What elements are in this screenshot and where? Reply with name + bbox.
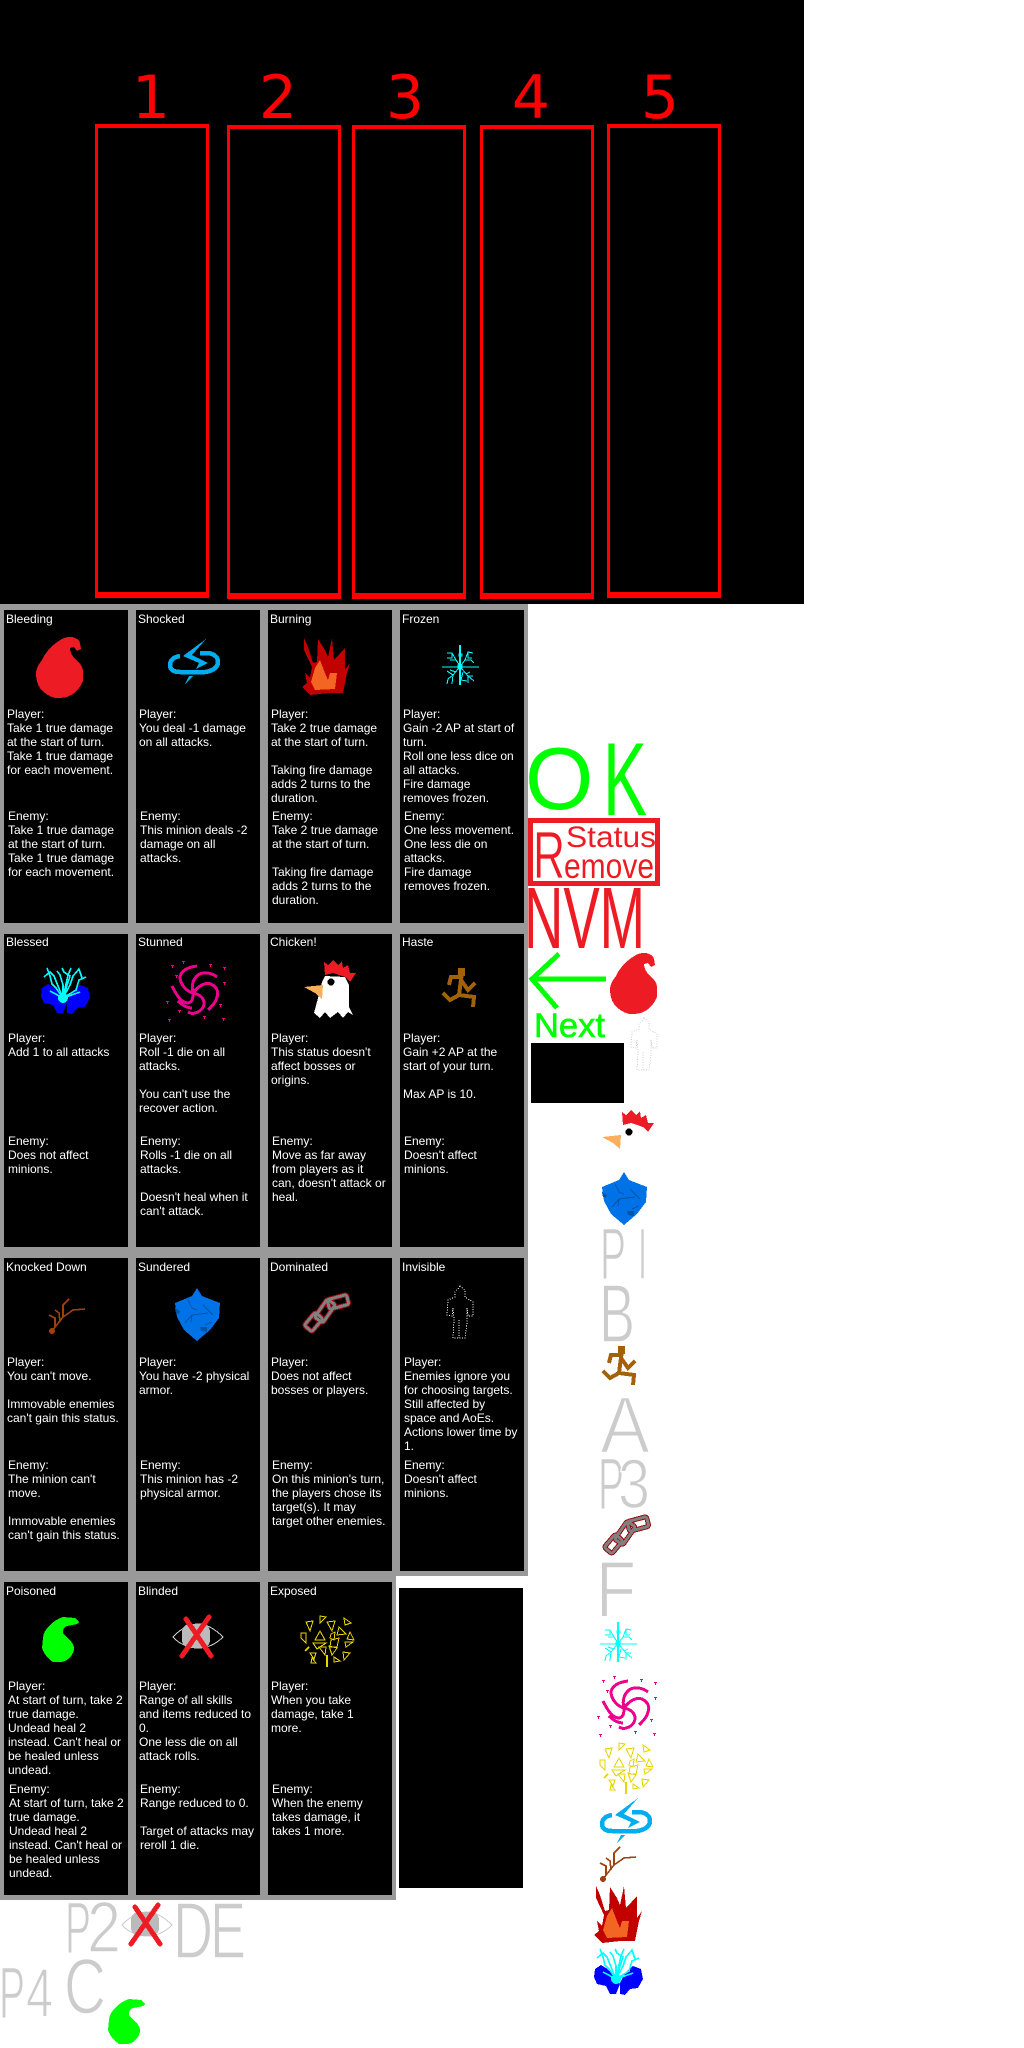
player text: for each movement. (7, 763, 113, 777)
icon: broken branch (48, 1298, 85, 1334)
panel: status grid background (0, 604, 528, 1576)
enemy text (404, 809, 514, 893)
icon: snowflake (442, 645, 479, 685)
icon: flame (302, 638, 350, 695)
icon: invisible figure copy (631, 1018, 657, 1070)
enemy text: When the enemy (272, 1796, 363, 1810)
player text (271, 1679, 354, 1735)
slot 2 (227, 63, 341, 599)
player text: Player: (271, 707, 308, 721)
icon: branch copy (600, 1847, 636, 1882)
sprite sheet: loose assets: I (638, 1214, 647, 1295)
enemy text: Enemy: (272, 1782, 313, 1796)
enemy text: minions. (404, 1162, 449, 1176)
enemy text: damage on all (140, 837, 215, 851)
icon: flame copy (594, 1886, 642, 1943)
player text: and items reduced to (139, 1707, 251, 1721)
Status Remove button (528, 818, 660, 893)
player text: Roll -1 die on all (139, 1045, 225, 1059)
player text: Player: (404, 1355, 441, 1369)
player text: 0. (139, 1721, 149, 1735)
player text: Player: (139, 707, 176, 721)
heading: Blessed (6, 935, 49, 949)
card: Blinded (136, 1582, 260, 1895)
label C: C (64, 1942, 106, 2030)
icon: blessed hands copy (594, 1949, 643, 1995)
black swatch (531, 1043, 624, 1103)
player text (139, 1355, 249, 1397)
card: Invisible (400, 1258, 524, 1571)
heading: Burning (270, 612, 311, 626)
enemy text: at the start of turn. (8, 837, 105, 851)
card: Chicken! (268, 934, 392, 1247)
enemy text: takes 1 more. (272, 1824, 345, 1838)
player text: Still affected by (404, 1397, 485, 1411)
enemy text: reroll 1 die. (140, 1838, 199, 1852)
player text (8, 1679, 123, 1777)
enemy text: can't gain this status. (8, 1528, 120, 1542)
player text: adds 2 turns to the (271, 777, 370, 791)
enemy text: Take 2 true damage (272, 823, 378, 837)
player text (139, 707, 246, 749)
player text: Taking fire damage (271, 763, 372, 777)
enemy text: Range reduced to 0. (140, 1796, 249, 1810)
enemy text: Enemy: (404, 1134, 445, 1148)
icon: running figure copy (603, 1346, 635, 1385)
enemy text: Enemy: (140, 1458, 181, 1472)
enemy text: Enemy: (404, 1458, 445, 1472)
enemy text (272, 1134, 386, 1204)
enemy text (140, 1782, 254, 1852)
enemy text: One less movement. (404, 823, 514, 837)
player text: Take 2 true damage (271, 721, 377, 735)
enemy text (140, 1458, 238, 1500)
enemy text: Does not affect (8, 1148, 88, 1162)
icon: green drop (42, 1617, 79, 1662)
enemy text (404, 1458, 477, 1500)
panel: status grid last row background (0, 1576, 396, 1900)
player text: Does not affect (271, 1369, 352, 1383)
enemy text: Take 1 true damage (8, 823, 114, 837)
player text: duration. (271, 791, 318, 805)
heading: Exposed (270, 1584, 317, 1598)
player text: can't gain this status. (7, 1411, 119, 1425)
player text: start of your turn. (403, 1059, 494, 1073)
player text: true damage. (8, 1707, 79, 1721)
player text: Add 1 to all attacks (8, 1045, 109, 1059)
player text: Take 1 true damage (7, 749, 113, 763)
player text (271, 707, 377, 805)
icon: chain copy (604, 1517, 649, 1554)
heading: Sundered (138, 1260, 190, 1274)
enemy text: Enemy: (8, 809, 49, 823)
enemy text: the players chose its (272, 1486, 381, 1500)
icon: crossed eye copy (122, 1905, 172, 1944)
label DE: D (173, 1886, 213, 1975)
icon: green drop copy (108, 1999, 145, 2044)
enemy text (9, 1782, 124, 1880)
label P3: 3 (618, 1445, 650, 1523)
player text: Actions lower time by (404, 1425, 517, 1439)
player text: recover action. (139, 1101, 218, 1115)
Status Remove button: R (533, 818, 565, 893)
card: Stunned (136, 934, 260, 1247)
icon: chicken (304, 960, 356, 1018)
enemy text: Immovable enemies (8, 1514, 115, 1528)
enemy text: Enemy: (9, 1782, 50, 1796)
player text: At start of turn, take 2 (8, 1693, 123, 1707)
icon: chicken copy (602, 1110, 654, 1168)
label P4: P (0, 1953, 25, 2034)
enemy text: Undead heal 2 (9, 1824, 87, 1838)
label P1: P (600, 1214, 626, 1295)
enemy text: Enemy: (140, 1782, 181, 1796)
enemy text: minions. (8, 1162, 53, 1176)
Status Remove button: emove (564, 847, 654, 886)
icon: lightning copy (602, 1798, 650, 1843)
card: Bleeding (4, 610, 128, 923)
enemy text: heal. (272, 1190, 298, 1204)
heading: Bleeding (6, 612, 53, 626)
enemy text: removes frozen. (404, 879, 490, 893)
icon: snowflake copy (600, 1622, 637, 1662)
enemy text (8, 809, 114, 879)
player text: origins. (271, 1073, 310, 1087)
label F: F (596, 1545, 636, 1634)
enemy text: Enemy: (272, 809, 313, 823)
enemy text (404, 1134, 477, 1176)
player text: for choosing targets. (404, 1383, 513, 1397)
player text: attack rolls. (139, 1749, 200, 1763)
player text (7, 707, 113, 777)
slot 3 (352, 63, 466, 599)
enemy text: move. (8, 1486, 41, 1500)
player text: You deal -1 damage (139, 721, 246, 735)
player text: Player: (8, 1031, 45, 1045)
player text: Gain -2 AP at start of (403, 721, 514, 735)
heading: Blinded (138, 1584, 178, 1598)
icon: spiral (166, 961, 226, 1022)
player text: Player: (403, 1031, 440, 1045)
enemy text: Enemy: (272, 1458, 313, 1472)
player text: undead. (8, 1763, 51, 1777)
OK button: K (603, 722, 647, 838)
enemy text: Doesn't affect (404, 1148, 477, 1162)
player text (8, 1031, 109, 1059)
player text: be healed unless (8, 1749, 99, 1763)
enemy text: adds 2 turns to the (272, 879, 371, 893)
player text: attacks. (139, 1059, 180, 1073)
enemy text: Fire damage (404, 865, 471, 879)
enemy text: instead. Can't heal or (9, 1838, 122, 1852)
enemy text: Enemy: (272, 1134, 313, 1148)
enemy text: from players as it (272, 1162, 363, 1176)
label P3: P (598, 1444, 624, 1525)
enemy text (272, 809, 378, 907)
player text: Player: (271, 1355, 308, 1369)
enemy text: Move as far away (272, 1148, 366, 1162)
icon: chain links (302, 1292, 351, 1334)
player text: Take 1 true damage (7, 721, 113, 735)
enemy text: Enemy: (140, 809, 181, 823)
enemy text: The minion can't (8, 1472, 96, 1486)
enemy text: This minion deals -2 (140, 823, 247, 837)
panel: empty black card (399, 1588, 523, 1888)
card: Poisoned (4, 1582, 128, 1895)
enemy text: be healed unless (9, 1852, 100, 1866)
player text: Max AP is 10. (403, 1087, 476, 1101)
player text: Fire damage (403, 777, 470, 791)
player text: Player: (403, 707, 440, 721)
heading: Dominated (270, 1260, 328, 1274)
player text: all attacks. (403, 763, 460, 777)
label A: A (600, 1381, 650, 1471)
NVM button: NVM (524, 870, 645, 967)
player text: more. (271, 1721, 302, 1735)
slot 2: 2 (259, 63, 297, 133)
icon: crossed eye (172, 1614, 224, 1658)
slot 5 (607, 63, 721, 598)
enemy text: Taking fire damage (272, 865, 373, 879)
icon: blood drop (36, 637, 83, 698)
enemy text (140, 1134, 248, 1218)
player text: You have -2 physical (139, 1369, 249, 1383)
enemy text: true damage. (9, 1810, 80, 1824)
enemy text (8, 1134, 88, 1176)
player text: Player: (271, 1031, 308, 1045)
player text: Player: (271, 1679, 308, 1693)
player text: turn. (403, 735, 427, 749)
heading: Chicken! (270, 935, 317, 949)
player text (7, 1355, 119, 1425)
player text (403, 1031, 497, 1101)
enemy text: At start of turn, take 2 (9, 1796, 124, 1810)
player text: damage, take 1 (271, 1707, 354, 1721)
enemy text: target(s). It may (272, 1500, 356, 1514)
enemy text: for each movement. (8, 865, 114, 879)
player text: Player: (139, 1031, 176, 1045)
heading: Knocked Down (6, 1260, 87, 1274)
label P2: 2 (87, 1888, 121, 1968)
player text: When you take (271, 1693, 351, 1707)
player text (404, 1355, 518, 1453)
player text: bosses or players. (271, 1383, 368, 1397)
enemy text: can't attack. (140, 1204, 204, 1218)
slot 4: 4 (512, 63, 550, 133)
player text: removes frozen. (403, 791, 489, 805)
player text: Gain +2 AP at the (403, 1045, 497, 1059)
player text: One less die on all (139, 1735, 238, 1749)
enemy text: Take 1 true damage (8, 851, 114, 865)
player text (271, 1031, 371, 1087)
player text: Immovable enemies (7, 1397, 114, 1411)
player text: Enemies ignore you (404, 1369, 510, 1383)
enemy text: attacks. (404, 851, 445, 865)
card: Dominated (268, 1258, 392, 1571)
heading: Haste (402, 935, 433, 949)
icon: running figure (442, 968, 476, 1007)
slot 5: 5 (641, 63, 679, 133)
player text: Roll one less dice on (403, 749, 514, 763)
panel: turn order slots (0, 0, 804, 604)
slot 3: 3 (386, 63, 424, 133)
enemy text: attacks. (140, 851, 181, 865)
enemy text: Doesn't heal when it (140, 1190, 248, 1204)
icon: shield copy (602, 1172, 647, 1225)
player text: affect bosses or (271, 1059, 356, 1073)
enemy text (272, 1458, 385, 1528)
player text: space and AoEs. (404, 1411, 494, 1425)
enemy text: takes damage, it (272, 1810, 360, 1824)
player text: Range of all skills (139, 1693, 232, 1707)
card: Knocked Down (4, 1258, 128, 1571)
player text: at the start of turn. (7, 735, 104, 749)
enemy text (140, 809, 247, 865)
icon: lightning ring (168, 639, 220, 684)
enemy text: physical armor. (140, 1486, 221, 1500)
player text: This status doesn't (271, 1045, 371, 1059)
enemy text (272, 1782, 363, 1838)
player text: 1. (404, 1439, 414, 1453)
player text: at the start of turn. (271, 735, 368, 749)
enemy text: duration. (272, 893, 319, 907)
icon: dotted figure (446, 1286, 474, 1338)
Status Remove button: Status (566, 821, 656, 854)
enemy text: Doesn't affect (404, 1472, 477, 1486)
card: Haste (400, 934, 524, 1247)
player text: Player: (139, 1679, 176, 1693)
label P4: 4 (26, 1954, 53, 2032)
player text: Player: (8, 1679, 45, 1693)
label P2: P (65, 1888, 91, 1969)
enemy text: Enemy: (8, 1458, 49, 1472)
slot 4 (480, 63, 594, 599)
enemy text: Enemy: (404, 809, 445, 823)
icon: fragments copy (600, 1743, 653, 1794)
enemy text: undead. (9, 1866, 52, 1880)
player text (403, 707, 514, 805)
card: Exposed (268, 1582, 392, 1895)
label B: B (599, 1267, 635, 1360)
card: Burning (268, 610, 392, 923)
OK button (525, 722, 647, 838)
enemy text: On this minion's turn, (272, 1472, 384, 1486)
player text (139, 1679, 251, 1763)
icon: spiral copy (597, 1676, 657, 1737)
player text: Player: (7, 707, 44, 721)
Next label: Next (534, 1007, 606, 1045)
enemy text: Enemy: (140, 1134, 181, 1148)
player text: You can't move. (7, 1369, 92, 1383)
enemy text: target other enemies. (272, 1514, 385, 1528)
heading: Shocked (138, 612, 185, 626)
heading: Frozen (402, 612, 439, 626)
enemy text: This minion has -2 (140, 1472, 238, 1486)
enemy text: at the start of turn. (272, 837, 369, 851)
enemy text: One less die on (404, 837, 487, 851)
slot 1 (95, 63, 209, 598)
arrow: back (532, 954, 606, 1008)
icon: cracked shield (175, 1288, 220, 1341)
player text: You can't use the (139, 1087, 230, 1101)
enemy text (8, 1458, 120, 1542)
card: Shocked (136, 610, 260, 923)
player text: instead. Can't heal or (8, 1735, 121, 1749)
heading: Stunned (138, 935, 183, 949)
enemy text: can, doesn't attack or (272, 1176, 386, 1190)
icon: blood drop copy (610, 953, 657, 1014)
enemy text: minions. (404, 1486, 449, 1500)
player text: Player: (7, 1355, 44, 1369)
OK button: O (525, 729, 593, 828)
player text: Player: (139, 1355, 176, 1369)
icon: shattered fragments (301, 1615, 354, 1667)
icon: blessed hands (41, 968, 90, 1014)
enemy text: Rolls -1 die on all (140, 1148, 232, 1162)
enemy text: Target of attacks may (140, 1824, 254, 1838)
enemy text: Enemy: (8, 1134, 49, 1148)
player text: armor. (139, 1383, 173, 1397)
card: Sundered (136, 1258, 260, 1571)
player text: on all attacks. (139, 735, 212, 749)
heading: Poisoned (6, 1584, 56, 1598)
slot 1: 1 (132, 63, 170, 133)
player text: Undead heal 2 (8, 1721, 86, 1735)
card: Frozen (400, 610, 524, 923)
heading: Invisible (402, 1260, 445, 1274)
player text (139, 1031, 230, 1115)
enemy text: attacks. (140, 1162, 181, 1176)
player text (271, 1355, 368, 1397)
label DE: E (210, 1886, 246, 1975)
card: Blessed (4, 934, 128, 1247)
